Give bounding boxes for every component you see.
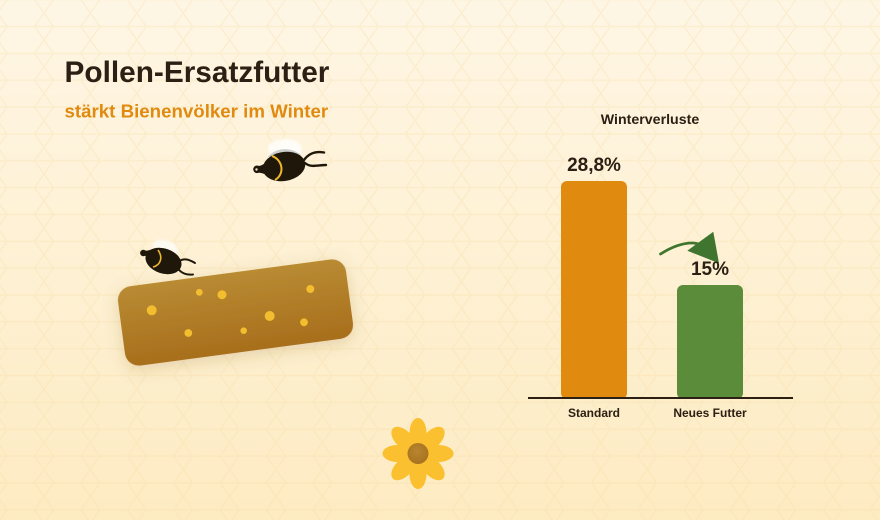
pollen dots xyxy=(147,285,314,337)
chart title: Winterverluste xyxy=(601,112,699,128)
baseline xyxy=(528,397,793,399)
value: 28,8%: 28,8% xyxy=(567,155,621,176)
arrow: decrease xyxy=(660,232,719,263)
label: Standard: Standard xyxy=(568,406,620,420)
label: Neues Futter: Neues Futter xyxy=(673,406,747,420)
icon: large bee xyxy=(253,139,326,185)
title: Pollen-Ersatzfutter xyxy=(64,56,330,89)
bar chart: Winterverluste xyxy=(528,112,793,420)
icon: sunflower xyxy=(382,418,454,489)
subtitle: stärkt Bienenvölker im Winter xyxy=(64,100,328,122)
pollen patty xyxy=(116,258,355,367)
icon: small bee xyxy=(140,237,195,279)
bar: Neues Futter xyxy=(677,285,743,399)
value: 15%: 15% xyxy=(691,259,729,280)
bar: Standard xyxy=(561,181,627,399)
